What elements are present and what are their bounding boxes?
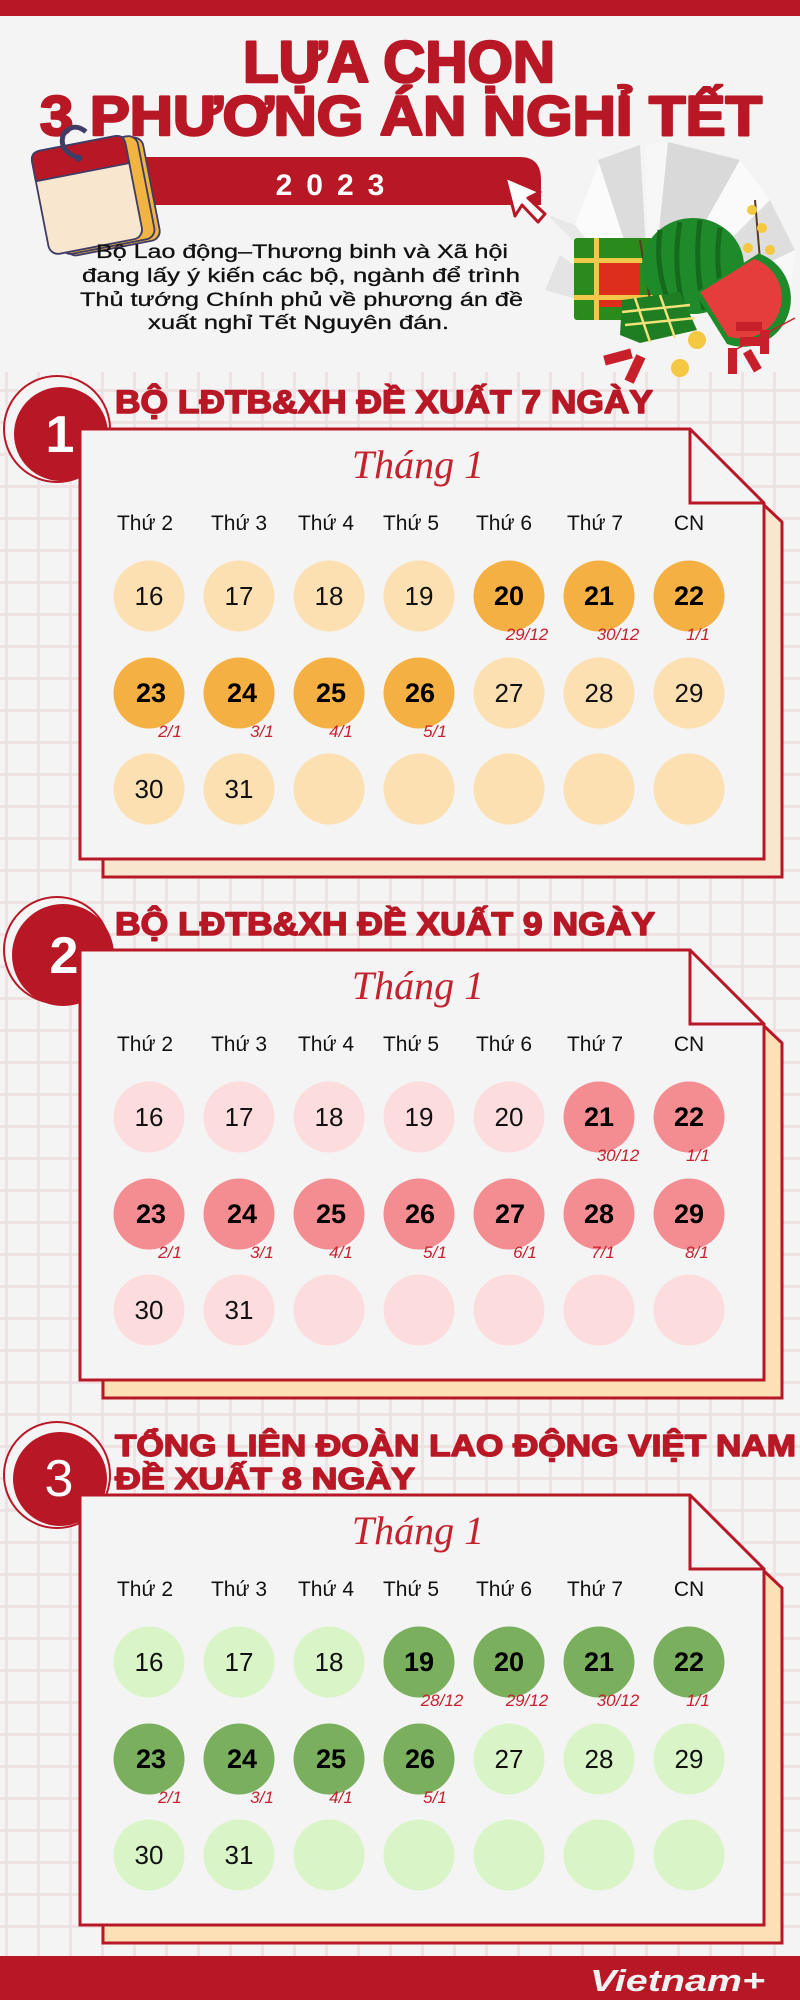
- panel 2 calendar: [80, 950, 782, 1398]
- panel 2 calendar: Thứ 6: [476, 1033, 532, 1056]
- title: LỰA CHỌN: [243, 30, 555, 95]
- panel 2 calendar: 26: [405, 1199, 435, 1229]
- panel 2 calendar: Thứ 5: [383, 1033, 439, 1056]
- panel 2 calendar: 16: [135, 1102, 163, 1132]
- panel 2 badge: 2: [50, 927, 78, 985]
- panel 3 calendar: 29/12: [505, 1691, 549, 1710]
- panel 3 calendar: 24: [227, 1744, 257, 1774]
- panel 2 calendar: 8/1: [685, 1243, 709, 1262]
- panel 2 calendar: Tháng 1: [352, 963, 484, 1008]
- panel 1 calendar: 1/1: [686, 625, 710, 644]
- icon: cursor: [505, 177, 545, 222]
- panel 3: [4, 1422, 796, 1943]
- panel 2 calendar: 30: [135, 1295, 163, 1325]
- panel 2 calendar: 7/1: [591, 1243, 615, 1262]
- panel 3 calendar: 26: [405, 1744, 435, 1774]
- panel 1 calendar: Thứ 2: [117, 512, 173, 535]
- panel 3 calendar: Thứ 5: [383, 1578, 439, 1601]
- panel 1 calendar: Thứ 7: [567, 512, 623, 535]
- panel 3 calendar: Thứ 7: [567, 1578, 623, 1601]
- panel 3 calendar: 1/1: [686, 1691, 710, 1710]
- illustration: tet decorations: [545, 142, 800, 384]
- panel 2 calendar: CN: [674, 1033, 704, 1056]
- panel 1 calendar: Thứ 6: [476, 512, 532, 535]
- panel 1 calendar: 3/1: [250, 722, 274, 741]
- footer: [0, 1956, 800, 2000]
- panel 3 heading: ĐỀ XUẤT 8 NGÀY: [115, 1461, 415, 1496]
- panel 3 calendar: 28/12: [420, 1691, 464, 1710]
- panel 1 calendar: 29: [675, 678, 703, 708]
- panel 1 calendar: 27: [495, 678, 523, 708]
- panel 1 calendar: 26: [405, 678, 435, 708]
- panel 1 calendar: 18: [315, 581, 343, 611]
- panel 3 calendar: [80, 1495, 782, 1943]
- panel 1 calendar: 21: [584, 581, 614, 611]
- panel 3 calendar: 2/1: [157, 1788, 182, 1807]
- panel 3 badge: 3: [45, 1450, 73, 1508]
- icon: calendar: [27, 115, 161, 260]
- panel 2 calendar: 25: [316, 1199, 346, 1229]
- panel 2 calendar: 17: [225, 1102, 253, 1132]
- panel 2 badge: [4, 897, 114, 1006]
- panel 2 calendar: 5/1: [423, 1243, 447, 1262]
- panel 1: [4, 376, 782, 877]
- panel 1 calendar: 20: [494, 581, 524, 611]
- panel 3 calendar: 30: [135, 1840, 163, 1870]
- panel 1 heading: BỘ LĐTB&XH ĐỀ XUẤT 7 NGÀY: [115, 384, 653, 420]
- panel 3 calendar: 29: [675, 1744, 703, 1774]
- panel 3 heading: TỔNG LIÊN ĐOÀN LAO ĐỘNG VIỆT NAM: [115, 1427, 796, 1463]
- panel 1 calendar: 25: [316, 678, 346, 708]
- panel 1 badge: 1: [46, 406, 74, 464]
- panel 1 calendar: 5/1: [423, 722, 447, 741]
- panel 3 calendar: 5/1: [423, 1788, 447, 1807]
- panel 3 calendar: 21: [584, 1647, 614, 1677]
- panel 3 calendar: 3/1: [250, 1788, 274, 1807]
- panel 2 calendar: 31: [225, 1295, 253, 1325]
- panel 3 calendar: CN: [674, 1578, 704, 1601]
- panel 2 calendar: Thứ 2: [117, 1033, 173, 1056]
- panel 3 calendar: 23: [136, 1744, 166, 1774]
- panel 2 calendar: 30/12: [597, 1146, 640, 1165]
- panel 1 calendar: 29/12: [505, 625, 549, 644]
- panel 1 calendar: [80, 429, 782, 877]
- panel 3 calendar: Thứ 2: [117, 1578, 173, 1601]
- panel 3 calendar: 18: [315, 1647, 343, 1677]
- panel 1 calendar: Thứ 5: [383, 512, 439, 535]
- panel 1 calendar: 2/1: [157, 722, 182, 741]
- panel 2 calendar: 19: [405, 1102, 433, 1132]
- panel 1 calendar: 16: [135, 581, 163, 611]
- panel 2 calendar: 6/1: [513, 1243, 537, 1262]
- panel 3 calendar: 17: [225, 1647, 253, 1677]
- panel 3 calendar: 28: [585, 1744, 613, 1774]
- panel 1 calendar: 30: [135, 774, 163, 804]
- intro text: Bộ Lao động–Thương binh và Xã hội: [96, 242, 508, 263]
- panel 2 calendar: 3/1: [250, 1243, 274, 1262]
- intro text: Thủ tướng Chính phủ về phương án đề: [80, 290, 523, 311]
- footer: Vietnam+: [590, 1963, 765, 1998]
- panel 3 heading: [115, 1427, 796, 1496]
- panel 1 calendar: 19: [405, 581, 433, 611]
- panel 1 calendar: Thứ 3: [211, 512, 267, 535]
- panel 2 calendar: 24: [227, 1199, 257, 1229]
- panel 2 calendar: 1/1: [686, 1146, 710, 1165]
- panel 3 calendar: 25: [316, 1744, 346, 1774]
- year banner: [122, 157, 541, 205]
- panel 3 calendar: 20: [494, 1647, 524, 1677]
- panel 2 calendar: 18: [315, 1102, 343, 1132]
- top bar: [0, 0, 800, 16]
- panel 1 calendar: 22: [674, 581, 704, 611]
- intro text: xuất nghỉ Tết Nguyên đán.: [148, 313, 449, 334]
- intro text: đang lấy ý kiến các bộ, ngành để trình: [82, 266, 520, 287]
- panel 1 calendar: 28: [585, 678, 613, 708]
- intro text: [80, 242, 523, 334]
- panel 2 heading: BỘ LĐTB&XH ĐỀ XUẤT 9 NGÀY: [115, 906, 655, 942]
- panel 3 calendar: Tháng 1: [352, 1508, 484, 1553]
- panel 1 calendar: 23: [136, 678, 166, 708]
- panel 1 calendar: 17: [225, 581, 253, 611]
- panel 2 calendar: Thứ 7: [567, 1033, 623, 1056]
- panel 2 calendar: 4/1: [329, 1243, 353, 1262]
- panel 2 calendar: 23: [136, 1199, 166, 1229]
- panel 1 calendar: 30/12: [597, 625, 640, 644]
- panel 3 calendar: 4/1: [329, 1788, 353, 1807]
- panel 2 calendar: Thứ 4: [298, 1033, 354, 1056]
- panel 2 calendar: 29: [674, 1199, 704, 1229]
- panel 3 badge: [4, 1422, 110, 1528]
- panel 1 badge: [4, 376, 110, 482]
- panel 2 calendar: 2/1: [157, 1243, 182, 1262]
- panel 2 calendar: 21: [584, 1102, 614, 1132]
- title: 3 PHƯƠNG ÁN NGHỈ TẾT: [40, 84, 762, 147]
- panel 1 calendar: 31: [225, 774, 253, 804]
- panel 3 calendar: Thứ 4: [298, 1578, 354, 1601]
- panel 3 calendar: 22: [674, 1647, 704, 1677]
- panel 3 calendar: 27: [495, 1744, 523, 1774]
- panel 2 calendar: 20: [495, 1102, 523, 1132]
- panel 1 calendar: Tháng 1: [352, 442, 484, 487]
- panel 2 calendar: 27: [495, 1199, 525, 1229]
- panel 1 calendar: 24: [227, 678, 257, 708]
- panel 3 calendar: 30/12: [597, 1691, 640, 1710]
- panel 1 calendar: 4/1: [329, 722, 353, 741]
- panel 2 calendar: 22: [674, 1102, 704, 1132]
- panel 3 calendar: 31: [225, 1840, 253, 1870]
- panel 3 calendar: Thứ 6: [476, 1578, 532, 1601]
- panel 2 calendar: 28: [584, 1199, 614, 1229]
- panel 2 calendar: Thứ 3: [211, 1033, 267, 1056]
- panel 2: [4, 897, 782, 1398]
- panel 3 calendar: Thứ 3: [211, 1578, 267, 1601]
- title: [40, 30, 762, 147]
- panel 3 calendar: 19: [404, 1647, 434, 1677]
- panel 3 calendar: 16: [135, 1647, 163, 1677]
- panel 1 calendar: Thứ 4: [298, 512, 354, 535]
- year banner: 2023: [276, 169, 398, 202]
- panel 1 calendar: CN: [674, 512, 704, 535]
